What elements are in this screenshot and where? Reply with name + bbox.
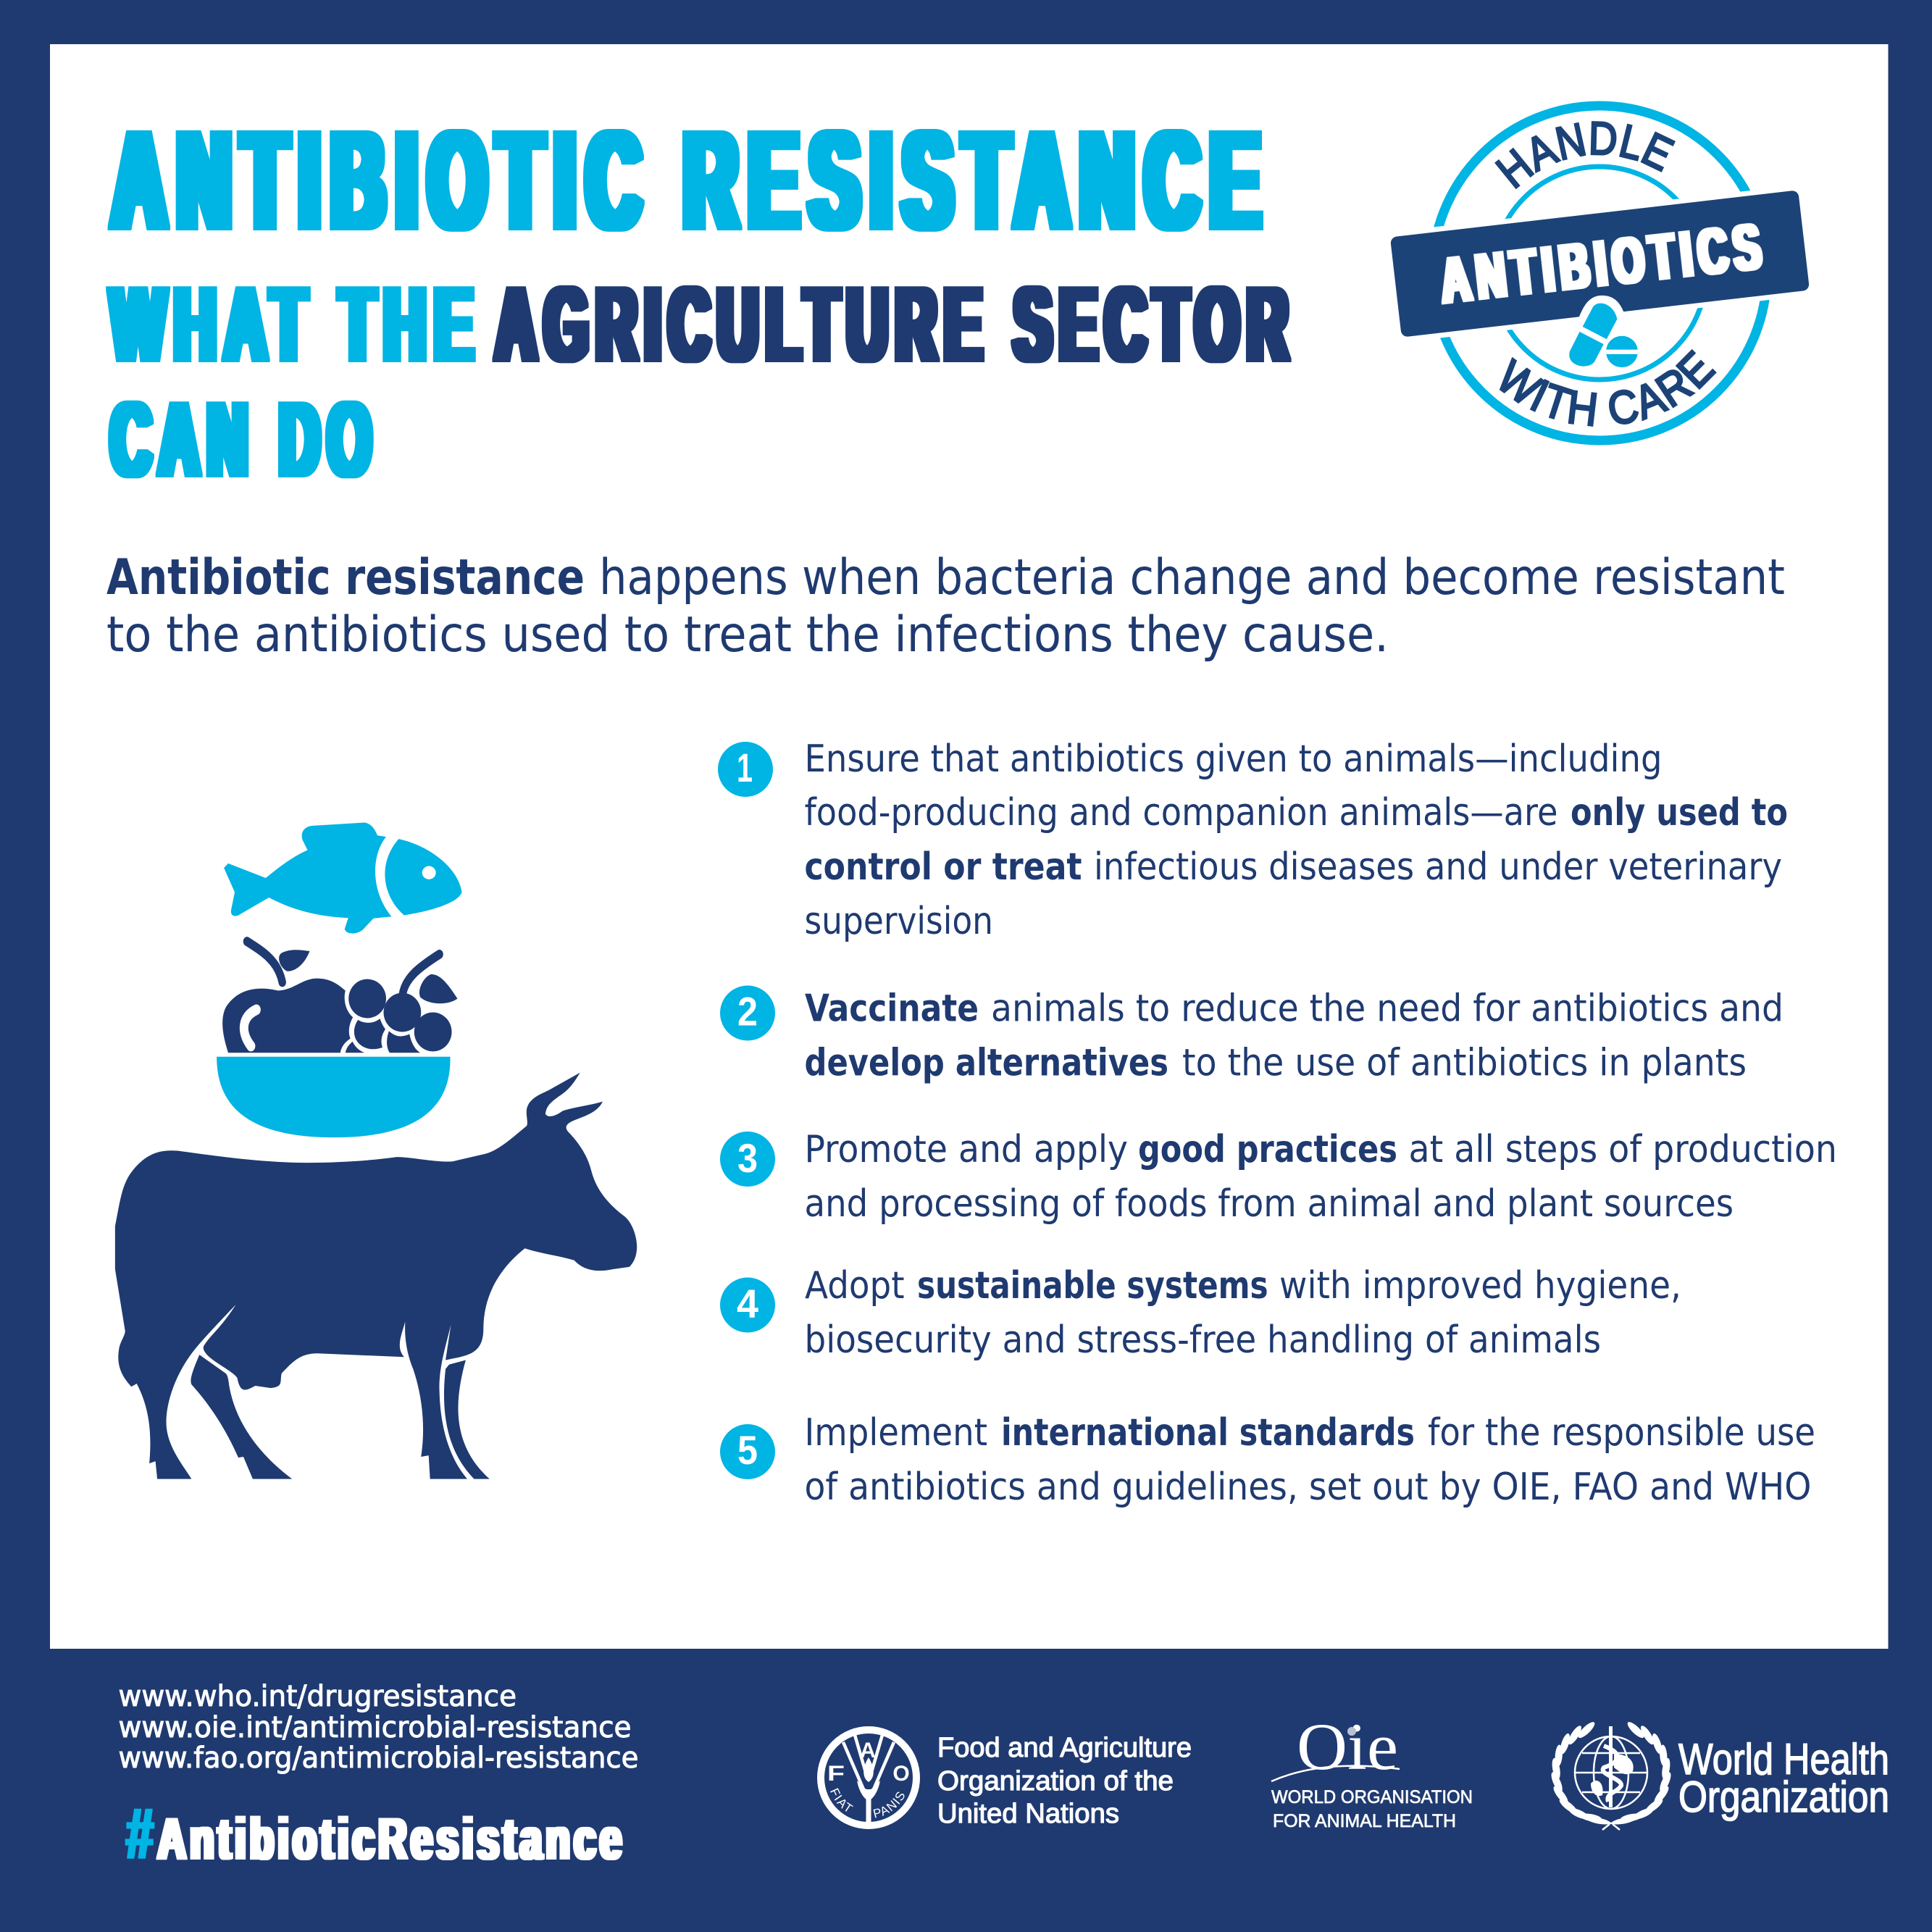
logo: WHO [1549, 1720, 1889, 1830]
item 4 text: biosecurity and stress-free handling of animals [804, 1318, 1601, 1362]
item 4 text: Adopt [805, 1264, 905, 1308]
OIE name: WORLD ORGANISATION [1271, 1787, 1473, 1807]
icon: pills [1569, 296, 1639, 367]
item 1 text: supervision [804, 900, 993, 943]
item 1 text: infectious diseases and under veterinary [1094, 845, 1782, 889]
OIE name [1271, 1787, 1473, 1831]
list item 5 [720, 1411, 1815, 1509]
item 2 text: animals to reduce the need for antibiotics and [991, 987, 1783, 1030]
FAO name: Food and Agriculture [937, 1733, 1192, 1763]
number badge 3: 3 [737, 1135, 758, 1181]
title line: what the: WHAT THE [111, 265, 482, 382]
number badge 4: 4 [737, 1281, 758, 1326]
item 1 text: food-producing and companion animals—are [804, 791, 1557, 835]
footer links: www.fao.org/antimicrobial-resistance [119, 1741, 639, 1775]
title [111, 102, 1296, 498]
FAO name [937, 1733, 1192, 1829]
FAO emblem: FIAT [830, 1788, 853, 1812]
title line: can do: CAN DO [111, 381, 380, 498]
item 5 text: Implement [804, 1411, 987, 1455]
logo: FAO [817, 1726, 1192, 1829]
number badge 5 [720, 1424, 775, 1479]
intro text: happens when bacteria change and become resistant [599, 549, 1785, 606]
logo: OIE [1271, 1710, 1473, 1831]
number badge 5: 5 [737, 1427, 758, 1473]
WHO name: Organization [1678, 1773, 1889, 1821]
number badge 2: 2 [737, 988, 758, 1034]
badge text: with care: WITH CARE [1500, 349, 1717, 427]
WHO emblem [1549, 1720, 1673, 1830]
list item 3 [720, 1128, 1837, 1226]
item 3 text: at all steps of production [1408, 1128, 1837, 1171]
item 1 text: control or treat [804, 845, 1082, 889]
OIE wordmark: Oie [1297, 1710, 1398, 1783]
number badge 2 [720, 985, 775, 1040]
number badge 1: 1 [737, 745, 753, 790]
hashtag [126, 1794, 626, 1873]
item 4 text [804, 1264, 1681, 1362]
item 2 text [804, 987, 1783, 1085]
footer links: www.oie.int/antimicrobial-resistance [119, 1711, 632, 1744]
illustration: fish, fruit bowl and cow [115, 823, 637, 1479]
item 5 text [804, 1411, 1815, 1509]
intro text [106, 549, 1785, 664]
badge banner [1390, 190, 1810, 338]
item 3 text [804, 1128, 1837, 1226]
item 2 text: to the use of antibiotics in plants [1182, 1042, 1747, 1085]
intro text: to the antibiotics used to treat the infections they cause. [106, 606, 1389, 664]
item 5 text: for the responsible use [1428, 1411, 1815, 1455]
list item 2 [720, 985, 1783, 1085]
hashtag: AntibioticResistance [158, 1807, 626, 1872]
item 4 text: sustainable systems [917, 1264, 1268, 1308]
item 1 text: only used to [1571, 791, 1788, 835]
OIE name: FOR ANIMAL HEALTH [1273, 1811, 1456, 1831]
footer links: www.who.int/drugresistance [119, 1680, 517, 1713]
FAO name: United Nations [937, 1799, 1119, 1829]
badge text: handle: HANDLE [1494, 121, 1676, 190]
icon: fish [224, 823, 461, 934]
item 3 text: and processing of foods from animal and plant sources [804, 1182, 1734, 1226]
FAO name: Organization of the [937, 1766, 1174, 1797]
item 1 text [804, 737, 1788, 943]
FAO emblem: A [860, 1739, 876, 1762]
list item 1 [718, 737, 1788, 943]
icon: bowl [217, 1057, 451, 1137]
item 4 text: with improved hygiene, [1279, 1264, 1681, 1308]
FAO emblem: PANIS [874, 1792, 904, 1818]
badge: handle antibiotics with care [1391, 101, 1810, 445]
icon: fruit [222, 942, 457, 1053]
FAO emblem: O [892, 1762, 910, 1786]
WHO name: World Health [1678, 1735, 1889, 1783]
item 3 text: good practices [1138, 1128, 1397, 1171]
list item 4 [720, 1264, 1681, 1362]
hashtag: # [126, 1794, 154, 1873]
number badge 3 [720, 1132, 775, 1187]
item 5 text: international standards [1001, 1411, 1415, 1455]
FAO emblem: F [827, 1762, 845, 1786]
item 2 text: Vaccinate [805, 987, 979, 1030]
item 3 text: Promote and apply [804, 1128, 1128, 1171]
item 5 text: of antibiotics and guidelines, set out by OIE, FAO and WHO [804, 1465, 1811, 1509]
FAO emblem [817, 1726, 920, 1829]
item 2 text: develop alternatives [804, 1042, 1168, 1085]
number badge 4 [720, 1278, 775, 1333]
item 1 text: Ensure that antibiotics given to animals—including [804, 737, 1662, 781]
footer links [119, 1680, 639, 1775]
icon: cow [115, 1073, 637, 1479]
number badge 1 [718, 742, 773, 797]
intro text: Antibiotic resistance [106, 549, 585, 606]
WHO name [1678, 1735, 1889, 1821]
